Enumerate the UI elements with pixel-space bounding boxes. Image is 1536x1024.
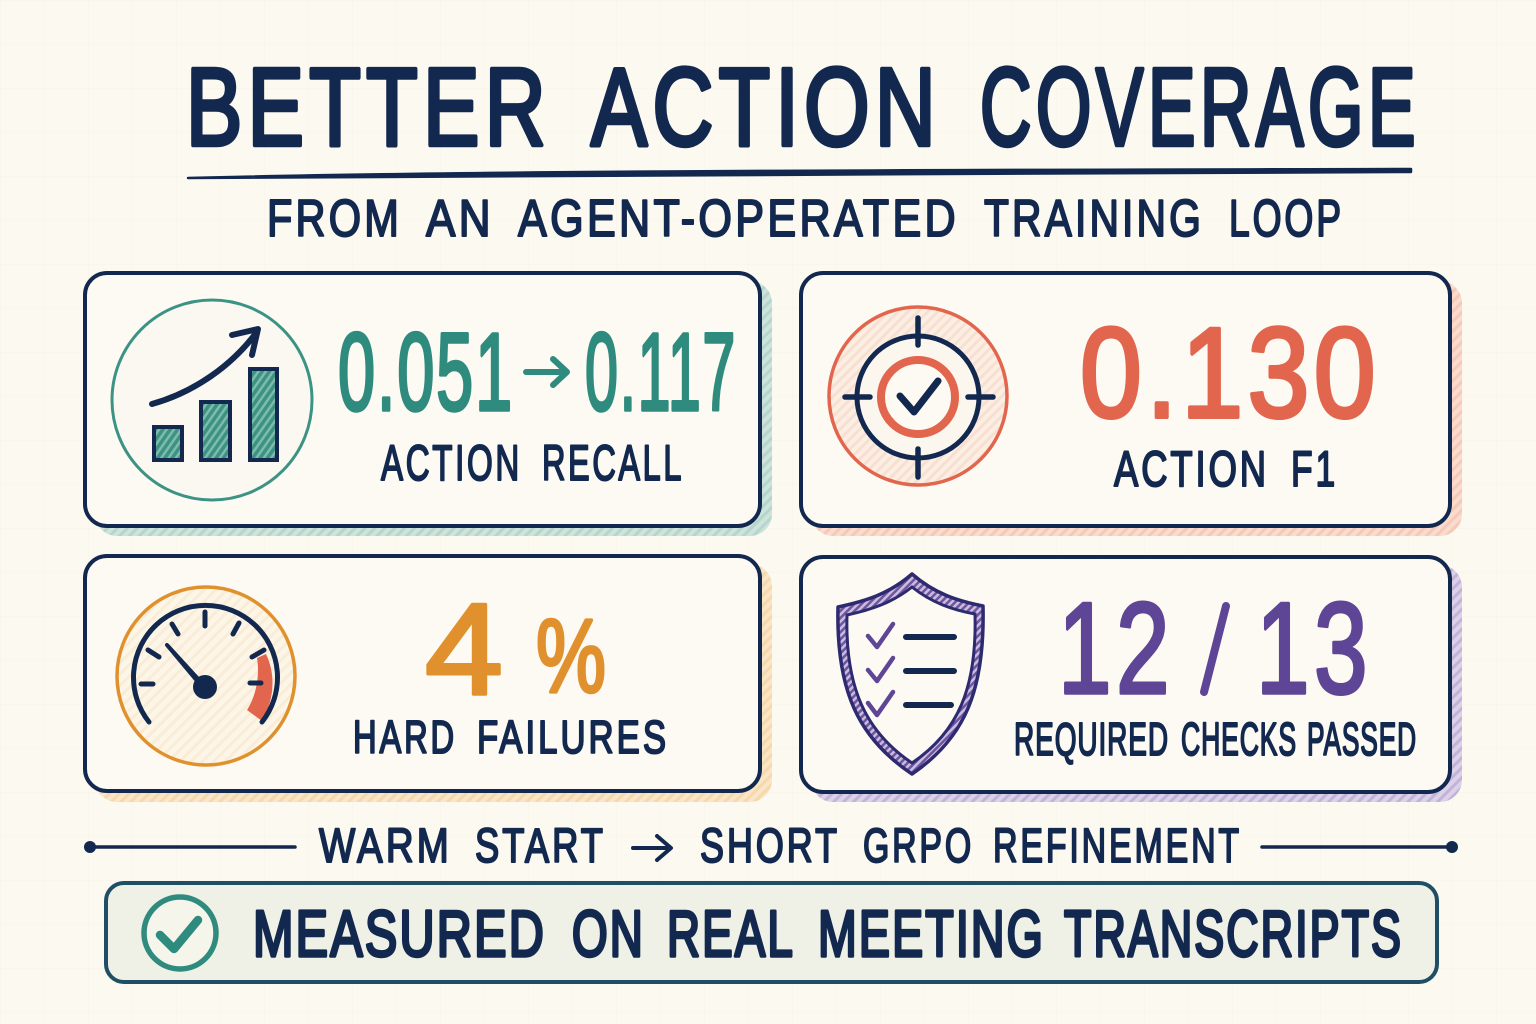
title: BETTER	[186, 46, 551, 169]
divider: warm start to short grpo refinement: START	[475, 820, 606, 873]
metric value: 4%: 4	[425, 576, 503, 722]
metric label: required checks passed: REQUIRED	[1014, 713, 1169, 765]
title	[186, 46, 1420, 178]
icon: check circle	[144, 897, 216, 969]
divider: warm start to short grpo refinement: REFINEMENT	[993, 820, 1242, 873]
subtitle: AGENT-OPERATED	[518, 190, 959, 248]
icon: rising bar chart	[112, 300, 312, 500]
panel: required checks	[801, 557, 1462, 802]
metric value: 4%	[425, 576, 606, 722]
divider: warm start to short grpo refinement	[84, 820, 1458, 873]
subtitle: FROM	[267, 190, 402, 248]
subtitle: AN	[426, 190, 494, 248]
metric value: 12/13	[1058, 575, 1372, 721]
metric value: 4%: %	[536, 599, 606, 715]
callout text: MEETING	[818, 897, 1045, 970]
icon: shield checklist	[838, 574, 983, 774]
metric label: action recall: RECALL	[542, 435, 684, 491]
metric value: recall change: 0.117	[585, 311, 737, 434]
subtitle: TRAINING	[984, 190, 1204, 248]
panel: action recall	[85, 273, 772, 536]
metric label: required checks passed: PASSED	[1307, 713, 1417, 765]
metric label: required checks passed: CHECKS	[1181, 713, 1297, 765]
metric value: recall change: 0.051	[338, 311, 514, 434]
callout text: REAL	[667, 897, 795, 970]
metric label: action f1: F1	[1291, 441, 1338, 497]
callout: measured on real meeting transcripts	[106, 883, 1437, 982]
metric label: action f1: ACTION	[1114, 441, 1269, 497]
metric label: action recall: ACTION	[381, 435, 522, 491]
metric label: required checks passed	[1014, 713, 1417, 765]
divider: warm start to short grpo refinement: GRPO	[863, 820, 974, 873]
callout text	[253, 897, 1403, 970]
metric label: hard failures: FAILURES	[477, 711, 669, 763]
divider: warm start to short grpo refinement: SHORT	[700, 820, 840, 873]
metric label: hard failures: HARD	[353, 711, 457, 763]
divider: warm start to short grpo refinement: WARM	[319, 820, 452, 873]
callout text: MEASURED	[253, 897, 546, 970]
panel: action f1	[801, 273, 1462, 536]
metric value: 12/13: 13	[1256, 575, 1372, 721]
icon: gauge	[117, 587, 295, 765]
subtitle: LOOP	[1229, 190, 1344, 248]
subtitle	[267, 190, 1344, 248]
panel: hard failures	[85, 556, 772, 802]
metric value: 0.130: 0.130	[1080, 302, 1380, 445]
metric label: hard failures	[353, 711, 669, 763]
callout text: ON	[572, 897, 645, 970]
metric value: 12/13: 12	[1058, 575, 1174, 721]
icon: target with check	[829, 307, 1007, 485]
title: ACTION	[591, 46, 941, 169]
